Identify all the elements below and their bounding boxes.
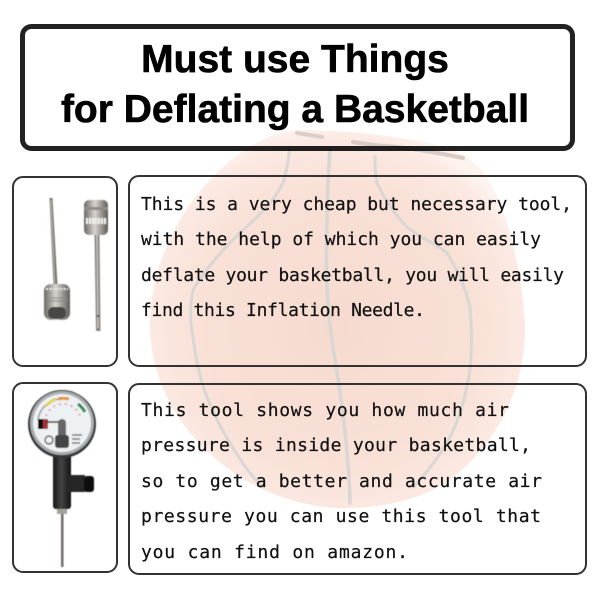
panel: needle description: [129, 176, 586, 366]
text: needle description: find this Inflation Needle.: [141, 300, 425, 321]
text: needle description: deflate your basketball, you will easily: [141, 265, 564, 286]
text: gauge description: so to get a better and accurate air: [141, 471, 542, 492]
text: needle description: This is a very cheap but necessary tool,: [141, 194, 572, 215]
panel: gauge image: [13, 383, 117, 572]
text: gauge description: pressure is inside your basketball,: [141, 435, 531, 456]
text: needle description: with the help of which you can easily: [141, 229, 541, 250]
text: gauge description: [141, 400, 542, 563]
icon: pressure gauge: [28, 390, 96, 567]
ball seams: [191, 133, 472, 503]
panel: needle image: [13, 177, 117, 366]
title text: for Deflating a Basketball: [61, 88, 529, 131]
title box: [22, 26, 572, 148]
title text: [61, 38, 529, 131]
panel: gauge description: [129, 384, 586, 574]
text: needle description: [141, 194, 572, 321]
title text: Must use Things: [141, 38, 449, 81]
text: gauge description: you can find on amazon.: [141, 542, 408, 563]
icon: inflation needles: [44, 198, 108, 331]
background basketball: [150, 130, 525, 508]
text: gauge description: This tool shows you how much air: [141, 400, 509, 421]
text: gauge description: pressure you can use this tool that: [141, 506, 541, 527]
